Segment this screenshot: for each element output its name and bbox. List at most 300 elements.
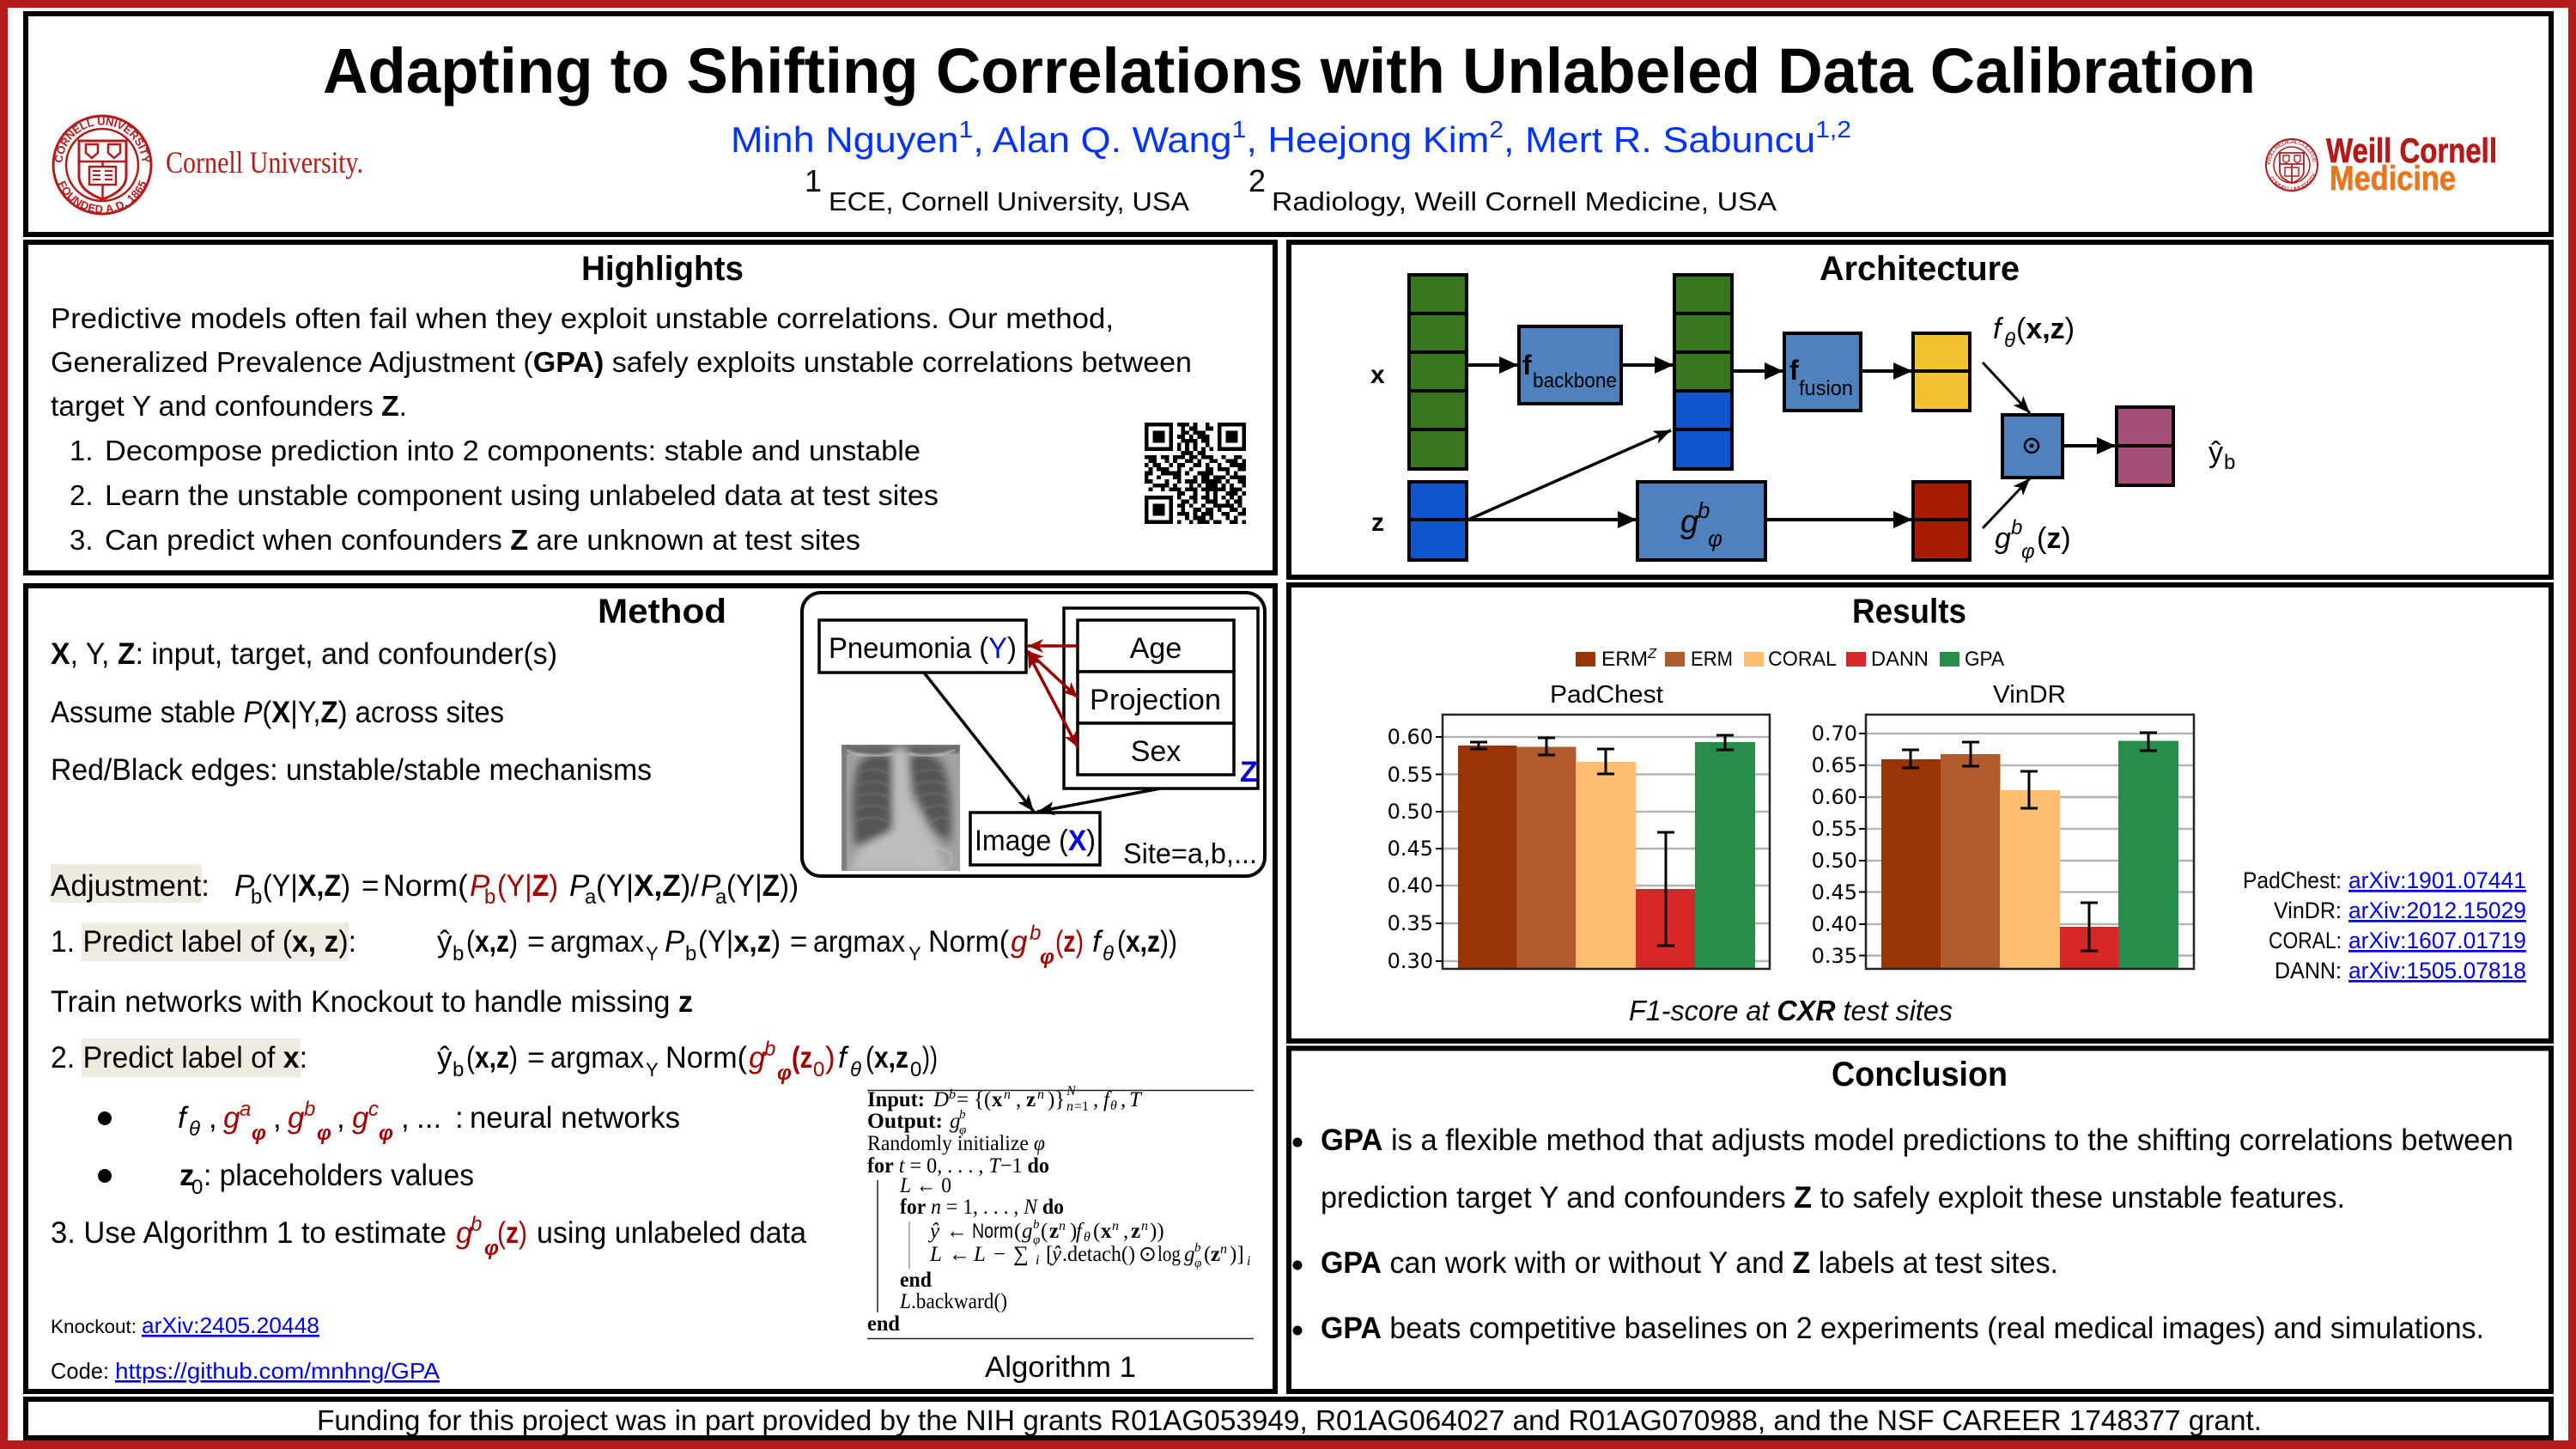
algorithm 1: φ — [1033, 1233, 1040, 1247]
step 3: using unlabeled data — [537, 1216, 807, 1250]
algorithm 1: ŷ — [1049, 1243, 1062, 1266]
adjustment formula: (Y|X,Z)/ — [596, 869, 699, 903]
step 3: g — [456, 1216, 473, 1250]
heading: conclusion: Conclusion — [1832, 1056, 2008, 1093]
adjustment formula: Adjustment: — [51, 869, 210, 903]
references: arXiv:1607.01719 — [2348, 928, 2526, 953]
algorithm 1: f — [1103, 1088, 1112, 1111]
intro paragraph: target Y and confounders Z. — [51, 390, 407, 422]
algorithm 1: n — [1037, 1087, 1044, 1102]
bullet: neural networks: , — [273, 1101, 282, 1135]
algorithm 1: b — [959, 1108, 966, 1122]
bar chart: VinDR: VinDR — [1993, 681, 2066, 709]
conclusion point 1: prediction target Y and confounders Z to safely exploit these unstable features. — [1321, 1181, 2345, 1215]
step 2: 0 — [813, 1058, 824, 1081]
bullet: neural networks: b — [304, 1098, 315, 1121]
algorithm 1: end — [900, 1269, 932, 1292]
algorithm 1: [ — [1046, 1243, 1053, 1266]
algorithm 1: ( — [1014, 1220, 1021, 1243]
node: image — [970, 813, 1100, 865]
numbered list: Can predict when confounders Z are unknown at test sites — [105, 524, 860, 556]
algorithm 1: φ — [1194, 1257, 1201, 1270]
node: age: Age — [1130, 632, 1182, 665]
adjustment formula: P — [569, 869, 590, 903]
logo: Weill Cornell Medicine — [2265, 132, 2497, 198]
input vector z — [1409, 482, 1467, 560]
step 2: ) — [825, 1041, 835, 1075]
bullet: neural networks: a — [240, 1098, 251, 1121]
algorithm 1: z — [1049, 1220, 1059, 1243]
bar chart: PadChest: 0.45 — [1388, 837, 1433, 861]
bar chart: PadChest: 0.30 — [1388, 949, 1433, 973]
bullet: neural networks: φ — [252, 1122, 266, 1145]
step 3: (z) — [497, 1216, 529, 1250]
algorithm 1: x — [992, 1088, 1003, 1111]
label: g phi of z: z) — [2046, 522, 2071, 555]
algorithm 1: L.backward() — [899, 1290, 1007, 1313]
bullet: neural networks: φ — [379, 1122, 393, 1145]
algorithm 1: n — [1059, 1219, 1066, 1233]
node: image: Image (X) — [975, 825, 1096, 857]
panel: method — [26, 586, 1275, 1391]
algorithm 1: b — [949, 1087, 956, 1102]
knockout note: Train networks with Knockout to handle missing z — [51, 985, 693, 1019]
label: y hat b: ŷ — [2208, 436, 2223, 469]
algorithm 1: θ — [1110, 1099, 1117, 1113]
intro paragraph — [51, 302, 1192, 422]
references: PadChest: — [2243, 868, 2342, 893]
bar chart: PadChest: 0.55 — [1388, 763, 1433, 787]
authors: 1 — [1232, 116, 1246, 143]
algorithm 1: n — [1066, 1099, 1073, 1114]
algorithm 1: ( — [1093, 1220, 1100, 1243]
algorithm 1: N — [1066, 1084, 1077, 1099]
algorithm 1: Input: — [867, 1088, 925, 1111]
node: projection: Projection — [1090, 684, 1221, 716]
intro paragraph: Predictive models often fail when they exploit unstable correlations. Our method, — [51, 302, 1114, 334]
adjustment formula: (Y|Z)) — [726, 869, 799, 903]
logo: Weill Cornell Medicine: Medicine — [2330, 160, 2456, 198]
label: y hat b: b — [2224, 451, 2235, 474]
affiliation 1: ECE, Cornell University, USA — [829, 186, 1189, 216]
algorithm 1: ← — [946, 1220, 968, 1243]
block: g phi: b — [1698, 497, 1710, 523]
panel: conclusion — [1289, 1048, 2551, 1391]
notation lines: X, Y, Z: input, target, and confounder(s) — [51, 637, 557, 671]
bullet: neural networks: , — [401, 1101, 410, 1135]
algorithm 1: T — [1129, 1088, 1143, 1111]
output f theta — [1913, 333, 1970, 411]
intro paragraph: Generalized Prevalence Adjustment ( GPA) safely exploits unstable correlations between — [51, 346, 1192, 378]
label: g phi of z: ( — [2037, 522, 2047, 555]
title: Adapting to Shifting Correlations with Unlabeled Data Calibration — [323, 35, 2256, 107]
logo: Cornell University: CORNELL UNIVERSITY — [55, 117, 149, 162]
label: g phi of z: φ — [2021, 540, 2035, 563]
label: site: Site=a,b,... — [1123, 837, 1257, 869]
step 2: θ — [850, 1058, 861, 1081]
step 1: f — [1092, 925, 1103, 959]
step 2: φ — [777, 1062, 792, 1085]
algorithm 1: φ — [959, 1123, 966, 1137]
label: g phi of z: b — [2011, 516, 2022, 539]
algorithm 1 — [867, 1084, 1254, 1384]
reference: code: https://github.com/mnhng/GPA — [115, 1358, 440, 1384]
logo: Weill Cornell Medicine: Weill Cornell — [2326, 132, 2497, 170]
confounder plate: Z — [1240, 756, 1258, 788]
bar chart: VinDR: 0.35 — [1812, 944, 1857, 968]
step 1: Y — [646, 943, 659, 965]
bullet: neural networks: ... — [416, 1101, 441, 1135]
adjustment formula: P — [234, 869, 255, 903]
step 1: θ — [1103, 942, 1114, 965]
authors: 1,2 — [1815, 116, 1851, 143]
step 2: f — [838, 1041, 849, 1075]
step 1: Norm( — [928, 925, 1009, 959]
affiliation 2 — [1249, 163, 1777, 216]
arrows: causal edges — [924, 646, 1160, 812]
step 1 — [51, 922, 1177, 969]
algorithm 1: n — [1112, 1219, 1119, 1233]
step 1: argmax — [813, 925, 905, 959]
step 3: b — [471, 1213, 482, 1236]
label z: z — [1371, 508, 1384, 537]
step 1: argmax — [550, 925, 644, 959]
references: VinDR: — [2274, 898, 2342, 923]
bullet: neural networks: g — [223, 1101, 240, 1135]
bar chart: PadChest: PadChest — [1550, 681, 1663, 709]
algorithm 1: , — [1123, 1220, 1128, 1243]
heading: architecture: Architecture — [1820, 250, 2020, 288]
authors: Minh Nguyen — [731, 119, 943, 160]
conclusion point 1 — [1293, 1123, 2513, 1215]
algorithm 1: z — [1211, 1243, 1220, 1266]
arrows: architecture — [1467, 362, 2116, 528]
reference: knockout: Knockout: — [51, 1316, 137, 1337]
references: arXiv:1901.07441 — [2348, 868, 2526, 893]
algorithm 1: n — [1004, 1087, 1011, 1102]
step 2: b — [453, 1058, 464, 1081]
bar chart: VinDR — [1812, 681, 2194, 969]
authors: 2 — [1489, 116, 1504, 143]
step 2: (z — [792, 1041, 812, 1075]
algorithm 1: ( — [1204, 1243, 1211, 1266]
chart legend: ERM — [1601, 648, 1647, 671]
algorithm 1: g — [1022, 1220, 1032, 1243]
bullet: neural networks: g — [288, 1101, 305, 1135]
chart legend: DANN — [1871, 648, 1929, 671]
step 1: g — [1011, 925, 1028, 959]
step 1: (z) — [1055, 925, 1085, 959]
algorithm 1: )} — [1048, 1088, 1065, 1111]
node: sex — [1078, 723, 1234, 775]
label: f theta: θ — [2004, 329, 2015, 352]
reference: code: Code: — [51, 1358, 109, 1384]
bar chart: VinDR: 0.40 — [1812, 912, 1857, 936]
authors: , Alan Q. Wang — [973, 119, 1232, 160]
algorithm 1: L ← 0 — [899, 1174, 951, 1197]
algorithm 1: ∑ — [1013, 1243, 1029, 1266]
step 2: b — [764, 1038, 775, 1061]
chart legend: ERM — [1691, 648, 1733, 671]
logo: Cornell University: Cornell University. — [166, 145, 363, 180]
bar chart: PadChest: 0.35 — [1388, 911, 1433, 935]
adjustment formula: P — [701, 869, 721, 903]
step 1: = — [527, 925, 544, 959]
notation lines — [51, 637, 652, 787]
step 2: g — [749, 1041, 766, 1075]
authors: 1 — [959, 116, 973, 143]
algorithm 1: .detach() — [1062, 1243, 1135, 1266]
algorithm 1: { — [974, 1088, 984, 1111]
numbered list: 1. — [70, 435, 94, 466]
algorithm 1: Norm — [972, 1220, 1013, 1243]
block: g phi — [1637, 482, 1765, 560]
block: element-wise product — [2002, 415, 2063, 478]
block: f backbone: f — [1522, 350, 1532, 381]
step 3: φ — [484, 1237, 499, 1260]
algorithm 1: for n = 1, . . . , N do — [900, 1196, 1064, 1219]
step 2: )) — [922, 1041, 938, 1075]
algorithm 1: , — [1016, 1088, 1021, 1111]
references: DANN: — [2275, 958, 2342, 983]
node: sex: Sex — [1131, 735, 1181, 768]
algorithm 1: Randomly initialize φ — [867, 1132, 1045, 1155]
algorithm 1: Output: — [867, 1110, 943, 1133]
adjustment formula: b — [484, 886, 495, 909]
algorithm 1: L — [929, 1243, 942, 1266]
logo: Weill Cornell Medicine: CORNELL UNIVERSITY — [2269, 173, 2315, 192]
step 2: (x,z — [866, 1041, 914, 1075]
panel: header — [23, 11, 2554, 237]
adjustment formula: = — [361, 869, 379, 903]
bullet: neural networks: , — [209, 1101, 217, 1135]
bar chart: PadChest: 0.50 — [1388, 800, 1433, 824]
step 2: 0 — [910, 1058, 921, 1081]
algorithm 1: θ — [1084, 1230, 1091, 1245]
numbered list — [70, 435, 939, 556]
algorithm 1: f — [1076, 1220, 1084, 1243]
bullet: neural networks: θ — [189, 1117, 200, 1141]
label: f theta: x,z) — [2026, 313, 2075, 345]
algorithm 1: ) — [1070, 1220, 1077, 1243]
bar chart: PadChest — [1388, 681, 1770, 973]
numbered list: Learn the unstable component using unlabeled data at test sites — [105, 479, 939, 511]
reference: knockout: arXiv:2405.20448 — [142, 1312, 319, 1338]
adjustment formula: a — [715, 886, 727, 909]
step 1: P — [665, 925, 685, 959]
caption: algorithm 1: Algorithm 1 — [985, 1351, 1136, 1384]
chart legend: GPA — [1965, 648, 2004, 671]
references — [2243, 868, 2526, 983]
chart legend — [1576, 647, 2004, 671]
step 1: b — [453, 942, 464, 965]
node: pneumonia — [819, 620, 1026, 673]
affiliation 2: 2 — [1249, 163, 1266, 198]
bar chart: PadChest: 0.40 — [1388, 874, 1433, 898]
algorithm 1: , — [1093, 1088, 1098, 1111]
block: g phi: φ — [1708, 526, 1722, 551]
algorithm 1: − — [993, 1243, 1005, 1266]
step 2: argmax — [550, 1041, 644, 1075]
bar chart: VinDR: 0.50 — [1812, 849, 1857, 873]
bullet: neural networks — [98, 1098, 680, 1145]
step 2: ŷ — [437, 1041, 453, 1075]
node: pneumonia: Pneumonia (Y) — [829, 632, 1017, 665]
numbered list: Decompose prediction into 2 components: stable and unstable — [105, 435, 920, 466]
algorithm 1: i — [1247, 1254, 1250, 1269]
bullet: placeholders — [98, 1159, 474, 1199]
chest x-ray image — [841, 745, 960, 871]
step 2: Y — [646, 1059, 659, 1081]
references: arXiv:1505.07818 — [2348, 958, 2526, 983]
block: f fusion — [1784, 333, 1861, 411]
panel: funding — [26, 1399, 2551, 1438]
references: arXiv:2012.15029 — [2348, 898, 2526, 923]
block: f backbone — [1519, 326, 1621, 404]
chart caption: F1-score at CXR test sites — [1629, 995, 1953, 1026]
step 3: 3. Use Algorithm 1 to estimate — [51, 1216, 447, 1250]
algorithm 1: g — [1184, 1243, 1195, 1266]
bar chart: VinDR: 0.45 — [1812, 880, 1857, 904]
heading: method: Method — [598, 593, 726, 630]
block: f fusion: f — [1789, 355, 1799, 386]
step 2: Norm( — [665, 1041, 747, 1075]
bar chart: VinDR: 0.55 — [1812, 817, 1857, 841]
adjustment formula — [51, 864, 799, 909]
step 2: (x,z) — [466, 1041, 519, 1075]
algorithm 1: ( — [984, 1088, 991, 1111]
logo: Cornell University — [52, 115, 363, 215]
funding statement: Funding for this project was in part provided by the NIH grants R01AG053949, R01AG064027 and R01AG070988, and the NSF CAREER 1748377 grant. — [317, 1404, 2262, 1436]
block: g phi: g — [1680, 504, 1698, 540]
bullet: neural networks: neural networks — [470, 1101, 680, 1135]
step 1: φ — [1040, 946, 1054, 969]
chart legend: CORAL — [1768, 648, 1837, 671]
step 1: (x,z) — [466, 925, 519, 959]
step 1: 1. Predict label of (x, z): — [51, 925, 356, 959]
confounder plate — [1064, 608, 1258, 788]
step 2 — [51, 1038, 938, 1085]
step 1: ŷ — [437, 925, 453, 959]
algorithm 1: for t = 0, . . . , T−1 do — [867, 1154, 1049, 1178]
block: f fusion: fusion — [1799, 377, 1853, 400]
heading: highlights: Highlights — [581, 250, 744, 288]
label: f theta: ( — [2016, 313, 2026, 345]
algorithm 1: b — [1033, 1218, 1040, 1232]
algorithm 1: b — [1194, 1241, 1201, 1255]
step 1: b — [1030, 922, 1041, 945]
authors: , Mert R. Sabuncu — [1504, 119, 1815, 160]
heading: results: Results — [1852, 593, 1966, 630]
step 1: Y — [908, 943, 921, 965]
block: f backbone: backbone — [1533, 369, 1617, 393]
references: CORAL: — [2269, 928, 2342, 953]
bullet: neural networks: φ — [317, 1122, 331, 1145]
algorithm 1: z — [1026, 1088, 1036, 1111]
panel: results — [1289, 585, 2551, 1041]
algorithm 1: D — [933, 1088, 949, 1111]
step 1: b — [685, 942, 696, 965]
step 1: (x,z)) — [1117, 925, 1180, 959]
panel: architecture — [1289, 242, 2551, 577]
bullet: neural networks: : — [455, 1101, 464, 1135]
authors: , Heejong Kim — [1246, 119, 1489, 160]
node: projection — [1078, 672, 1234, 723]
adjustment formula: Norm( — [383, 869, 468, 903]
algorithm 1: , — [1121, 1088, 1126, 1111]
bullet: neural networks: c — [368, 1098, 379, 1121]
concatenated vector — [1674, 275, 1732, 469]
numbered list: 2. — [70, 479, 94, 511]
step 2: 2. Predict label of x: — [51, 1041, 307, 1075]
logo: Weill Cornell Medicine: WEILL MEDICAL COLLEGE — [2267, 140, 2317, 165]
prediction vector — [2117, 407, 2173, 485]
adjustment formula: (Y|X,Z) — [263, 869, 351, 903]
bar chart: VinDR: 0.70 — [1812, 721, 1857, 746]
algorithm 1: ŷ — [927, 1220, 940, 1243]
bar chart: VinDR: 0.65 — [1812, 753, 1857, 777]
algorithm 1: ⊙ — [1139, 1243, 1157, 1266]
affiliation 2: Radiology, Weill Cornell Medicine, USA — [1272, 186, 1777, 216]
algorithm 1: ← — [949, 1243, 970, 1266]
conclusion point 3: GPA beats competitive baselines on 2 experiments (real medical images) and simulations. — [1321, 1312, 2484, 1345]
step 1: (Y|x,z) — [698, 925, 781, 959]
algorithm 1: x — [1101, 1220, 1112, 1243]
adjustment formula: P — [470, 869, 490, 903]
numbered list: 3. — [70, 524, 94, 556]
label x: x — [1370, 361, 1385, 389]
adjustment formula: (Y|Z) — [497, 869, 559, 903]
step 2: = — [527, 1041, 544, 1075]
node: age — [1078, 620, 1234, 672]
algorithm 1: i — [1036, 1253, 1039, 1268]
conclusion point 2: GPA can work with or without Y and Z labels at test sites. — [1321, 1246, 2058, 1280]
bullet: placeholders: : placeholders values — [204, 1159, 474, 1192]
adjustment formula: a — [585, 886, 597, 909]
logo: Cornell University: FOUNDED A.D. 1865 — [58, 180, 146, 213]
panel: highlights — [26, 242, 1275, 573]
notation lines: Assume stable P(X|Y,Z) across sites — [51, 696, 504, 729]
bullet: placeholders: 0 — [191, 1176, 203, 1199]
algorithm 1: z — [1131, 1220, 1140, 1243]
adjustment formula: b — [251, 886, 262, 909]
algorithm 1: n — [1220, 1242, 1227, 1257]
label: f theta: f — [1993, 313, 2001, 345]
algorithm 1: )) — [1150, 1220, 1164, 1243]
algorithm 1: = — [957, 1088, 969, 1111]
icon: QR code — [1145, 423, 1246, 524]
conclusion point 1: GPA is a flexible method that adjusts model predictions to the shifting correlations between — [1321, 1123, 2513, 1157]
bullet: neural networks: g — [352, 1101, 369, 1135]
algorithm 1: )] — [1230, 1243, 1244, 1266]
bullet: placeholders: z — [179, 1159, 194, 1192]
bar chart: VinDR: 0.60 — [1812, 785, 1857, 809]
notation lines: Red/Black edges: unstable/stable mechanisms — [51, 753, 652, 787]
bullet: neural networks: , — [337, 1101, 345, 1135]
algorithm 1: log — [1157, 1243, 1181, 1266]
chart legend: Z — [1647, 647, 1657, 661]
step 1: = — [790, 925, 807, 959]
bar chart: PadChest: 0.60 — [1388, 725, 1433, 749]
algorithm 1: end — [867, 1312, 900, 1336]
algorithm 1: L — [973, 1243, 986, 1266]
affiliation 1 — [805, 163, 1189, 216]
algorithm 1: g — [950, 1110, 960, 1133]
label: g phi of z: g — [1995, 522, 2011, 555]
causal diagram — [802, 593, 1265, 876]
output g phi — [1913, 482, 1970, 560]
algorithm 1: =1 — [1074, 1099, 1089, 1114]
